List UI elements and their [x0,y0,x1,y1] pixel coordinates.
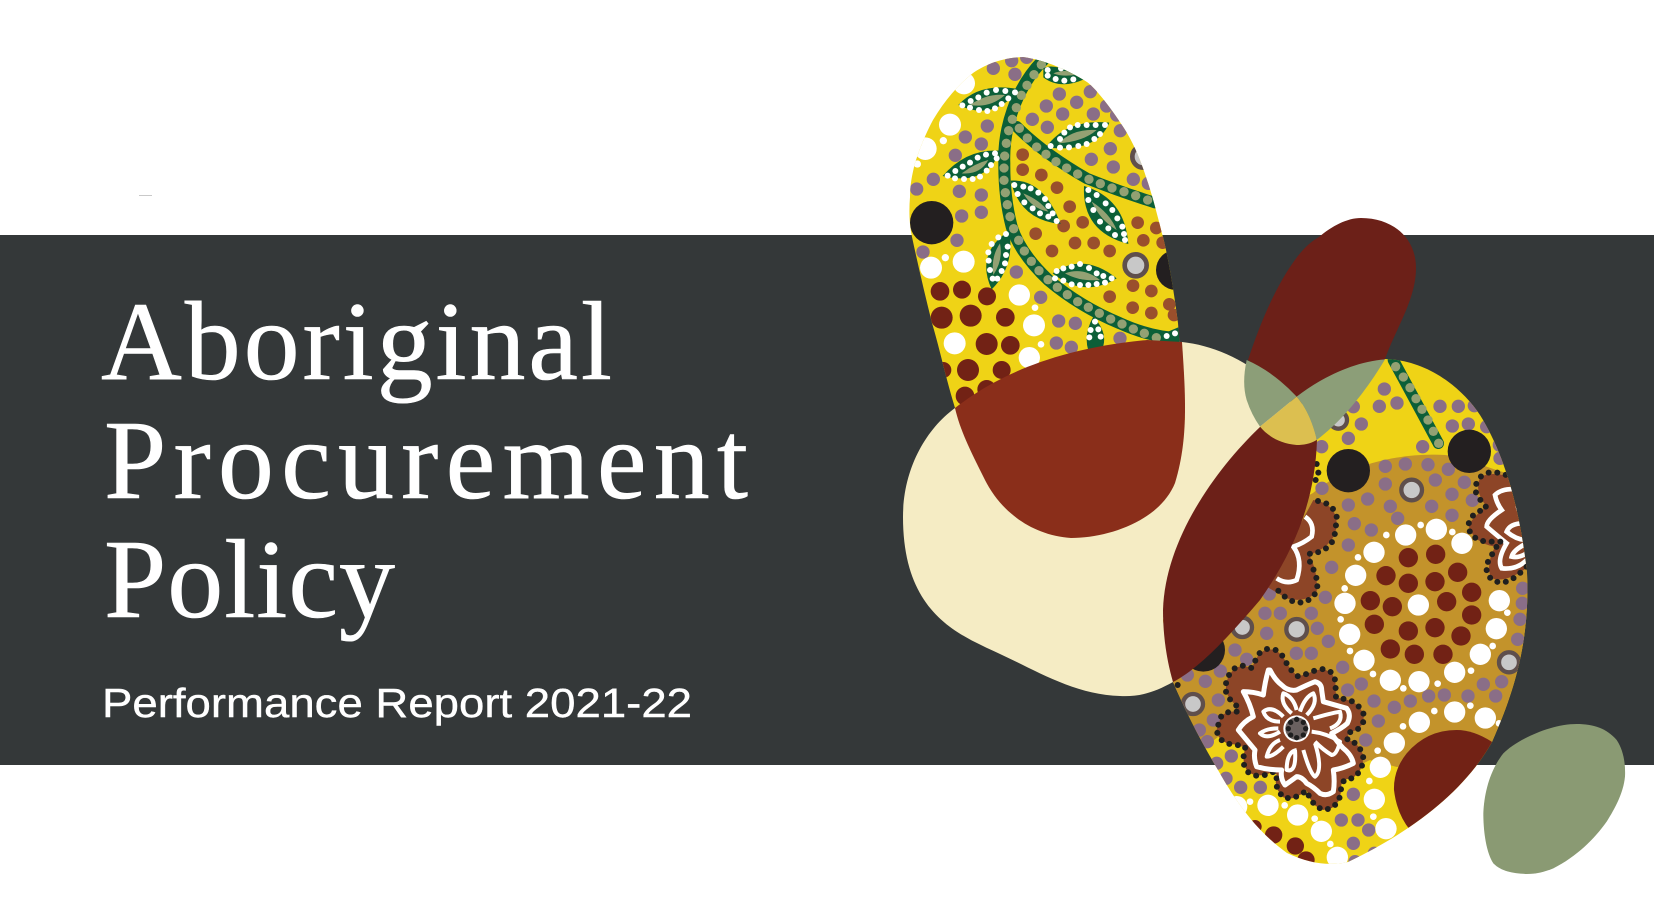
title: Policy [104,518,395,642]
subtitle: Performance Report 2021-22 [102,680,692,726]
dark title band [0,235,1654,765]
lower yellow and ochre dot-painted pod with flowers [1163,359,1528,864]
sage green blob [1483,724,1625,874]
title: Procurement [104,399,748,523]
translucent overlap petals [1244,359,1385,445]
small mark above band [139,195,152,196]
main flower motif [1216,649,1364,810]
upper yellow dot-painted pod with vine [909,57,1185,420]
dark red oval lower section [1163,397,1317,682]
dark red corner blob [1394,730,1492,828]
ochre field [1160,455,1540,775]
terracotta overlap shape [955,340,1185,538]
title: Aboriginal [101,280,612,404]
cream organic shape [903,342,1317,696]
dark red oval upper section [1248,218,1416,397]
title [101,280,748,642]
